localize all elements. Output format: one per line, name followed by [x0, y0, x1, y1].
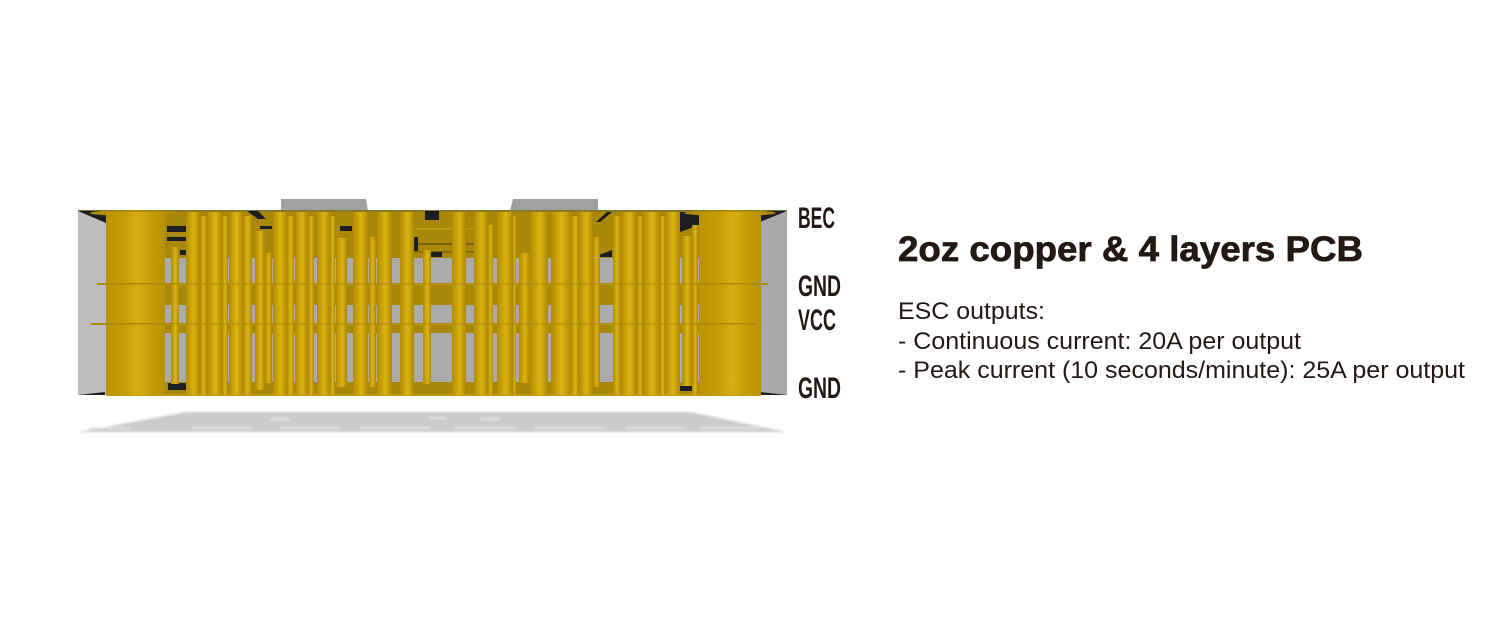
copper plates: [165, 211, 700, 395]
tall vias: [186, 212, 680, 395]
short vias: [171, 225, 698, 395]
black solder mask fragments: [78, 211, 787, 395]
text block: ESC output specs: - Continuous current: 20A per output: [898, 328, 1301, 355]
floor shadow of PCB: [78, 412, 786, 432]
layer lines across vias: [165, 283, 700, 324]
heading: 2oz copper & 4 layers PCB: [898, 230, 1363, 269]
text block: ESC output specs: ESC outputs:: [898, 298, 1045, 325]
label: GND upper: GND: [798, 270, 841, 303]
connector blocks on top: [281, 199, 598, 211]
layer edge lines: [78, 210, 787, 396]
large left capacitor pad: [90, 210, 182, 395]
text block: ESC output specs: - Peak current (10 seconds/minute): 25A per output: [898, 357, 1465, 384]
PCB 3D cross-section: [78, 199, 787, 396]
label: VCC: VCC: [798, 304, 836, 337]
large right capacitor pad: [684, 210, 776, 395]
text block: ESC output specs: [898, 298, 1465, 384]
grey side walls and interior: [78, 212, 787, 395]
label: BEC: BEC: [798, 202, 835, 235]
label: GND lower: GND: [798, 372, 841, 405]
